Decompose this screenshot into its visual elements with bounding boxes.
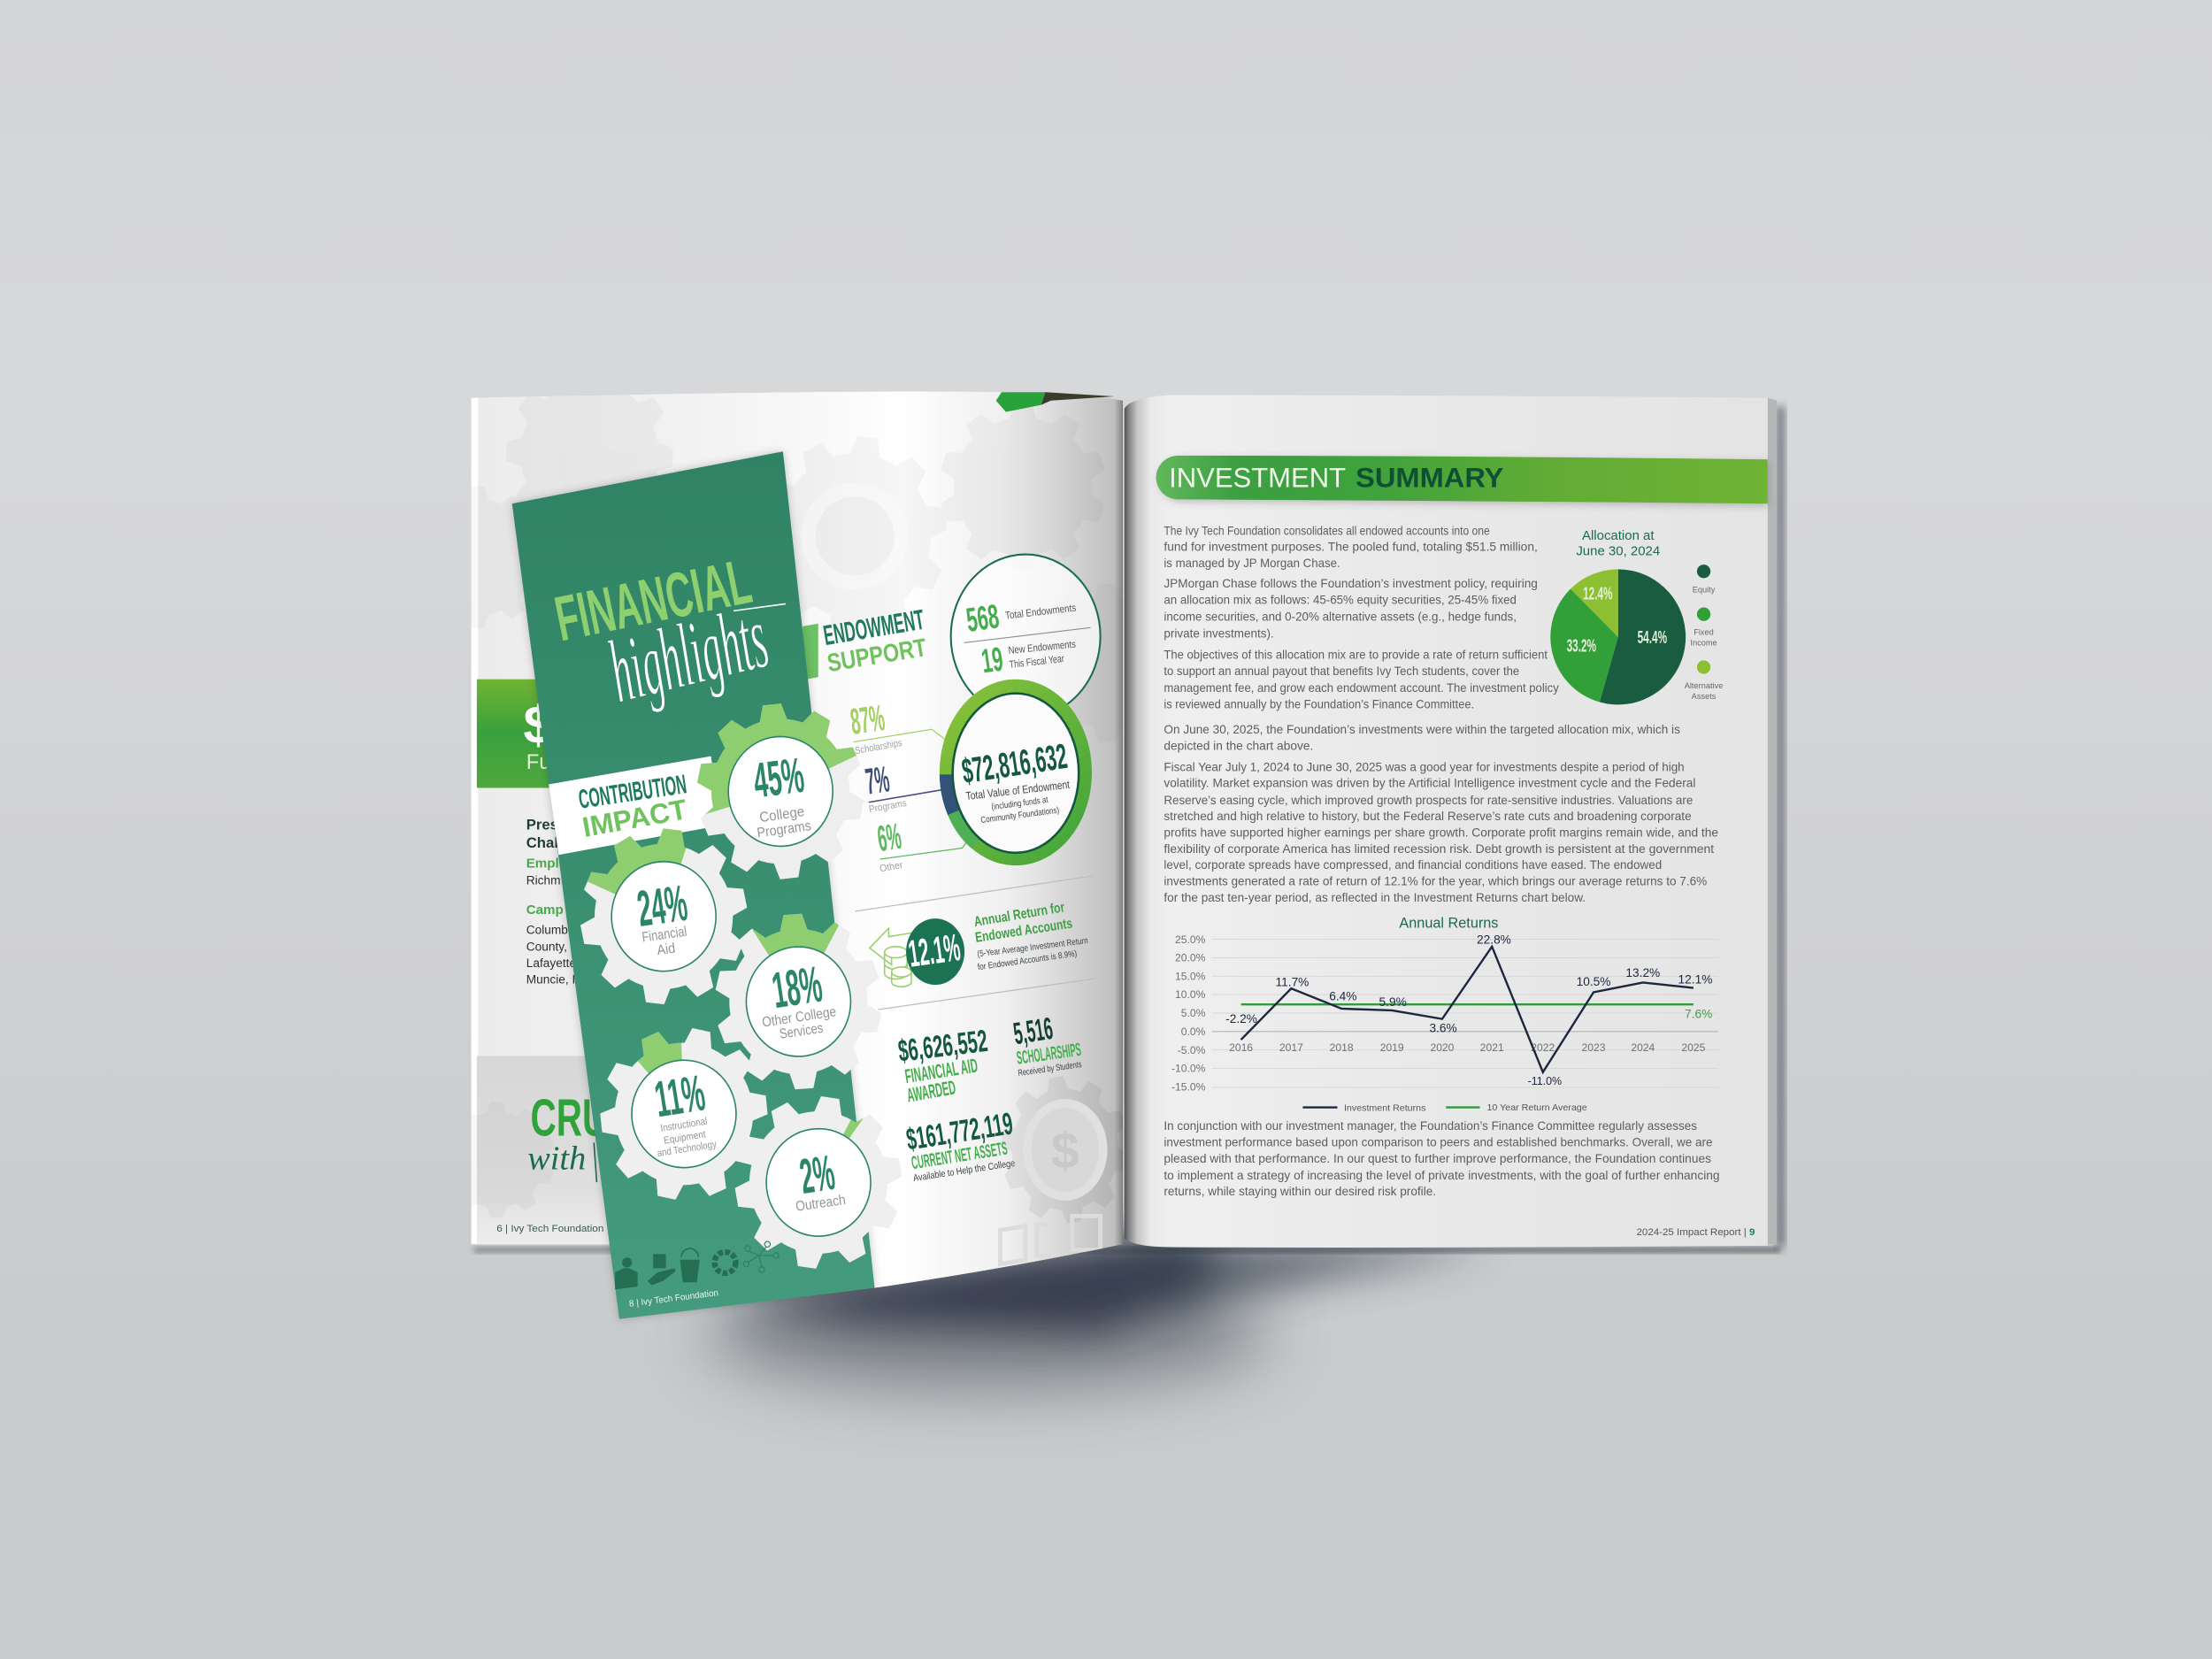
- intro text block: to support an annual payout that benefits Ivy Tech students, cover the: [1164, 664, 1519, 678]
- data labels: 3.6%: [1429, 1021, 1457, 1034]
- intro text block: [1164, 524, 1559, 710]
- gear labels: Aid: [656, 941, 676, 958]
- endowment count circle: New Endowments: [1008, 639, 1077, 657]
- text: SCHOLARSHIPS: [1016, 1040, 1082, 1069]
- divider: [879, 979, 1095, 1010]
- gear labels: Financial: [641, 925, 687, 946]
- watermark gear hub: [802, 482, 909, 589]
- data labels: 22.8%: [1477, 933, 1511, 947]
- closing text block: investment performance based upon comparison to peers and established benchmarks. Overall, we are: [1164, 1135, 1713, 1148]
- x axis labels: 2017: [1279, 1041, 1303, 1054]
- investment summary banner: INVESTMENT: [1169, 463, 1346, 494]
- data labels: 6.4%: [1329, 989, 1356, 1002]
- chart legend: [1302, 1102, 1587, 1113]
- intro text block: income securities, and 0-20% alternative assets (e.g., hedge funds,: [1164, 611, 1517, 624]
- data labels: -11.0%: [1528, 1075, 1562, 1087]
- page 9 footer: 2024-25 Impact Report | 9: [1636, 1227, 1755, 1238]
- intro text block: an allocation mix as follows: 45-65% equity securities, 25-45% fixed: [1164, 593, 1517, 606]
- dollar gear watermark: page 8: [998, 1076, 1122, 1267]
- y axis labels: 15.0%: [1175, 970, 1206, 982]
- x axis labels: [1229, 1041, 1706, 1054]
- page 8 footer: 8 | Ivy Tech Foundation: [628, 1288, 719, 1310]
- x axis labels: 2020: [1430, 1041, 1455, 1054]
- intro text block: is reviewed annually by the Foundation’s Finance Committee.: [1164, 697, 1474, 710]
- y axis labels: 20.0%: [1175, 952, 1206, 964]
- financial aid stats: AWARDED: [905, 1076, 957, 1107]
- green financial highlights sheet: [512, 451, 913, 1319]
- allocation breakdown labels and connector lines: 87%: [848, 696, 887, 742]
- dark gear teeth near spine: [1028, 584, 1187, 742]
- president profile text: page 6: County,: [526, 941, 567, 954]
- right page: [1125, 395, 1777, 1248]
- allocation breakdown labels and connector lines: Programs: [868, 798, 908, 815]
- closing text block: pleased with that performance. In our quest to further improve performance, the Foundation continues: [1164, 1152, 1711, 1165]
- title: financial highlights: FINANCIAL: [549, 546, 757, 655]
- background gear watermarks: [563, 449, 1012, 636]
- data labels: 12.1%: [1678, 972, 1712, 986]
- president profile text: page 6: Camp: [526, 902, 564, 918]
- endowment count circle: 19: [979, 641, 1005, 680]
- x axis labels: 2021: [1480, 1041, 1504, 1054]
- financial aid stats: $161,772,119: [904, 1106, 1015, 1157]
- market commentary text block: investments generated a rate of return of 12.1% for the year, which brings our average returns to 7.6%: [1164, 874, 1707, 887]
- dollar gear watermark: page 8: $: [1051, 1123, 1079, 1179]
- data labels: [1225, 933, 1712, 1087]
- investment summary banner: [1156, 456, 1768, 506]
- gear labels: Outreach: [795, 1193, 847, 1215]
- gear: 45% college programs: [697, 703, 864, 879]
- pie legend: Fixed: [1694, 627, 1714, 636]
- intro text block: The Ivy Tech Foundation consolidates all endowed accounts into one: [1164, 524, 1490, 537]
- pie legend: Equity: [1693, 586, 1716, 595]
- annual return block: (5-Year Average Investment Return: [977, 936, 1088, 959]
- market commentary text block: On June 30, 2025, the Foundation’s investments were within the targeted allocation mix, which is: [1164, 723, 1680, 736]
- green financial highlights sheet: highlights: [600, 588, 777, 722]
- y axis labels: [1171, 933, 1206, 1093]
- president profile text: page 6: Muncie, I: [526, 972, 575, 986]
- gear labels: Instructional: [660, 1117, 708, 1134]
- gear labels: Programs: [757, 818, 812, 841]
- x axis labels: 2016: [1229, 1041, 1253, 1054]
- green heading band: page 6: [476, 680, 549, 787]
- gray crucial panel: page 6: with: [527, 1141, 586, 1178]
- annual returns line chart: Annual Returns: [1399, 915, 1498, 931]
- endowment count circle: This Fiscal Year: [1009, 653, 1064, 671]
- x axis labels: 2019: [1380, 1041, 1404, 1054]
- chart legend: 10 Year Return Average: [1486, 1102, 1587, 1113]
- x axis labels: 2025: [1681, 1041, 1706, 1054]
- data labels: 5.9%: [1379, 995, 1407, 1009]
- gear labels: Equipment: [663, 1129, 707, 1147]
- gear labels: [634, 747, 847, 1215]
- endowment count circle: 568: [964, 597, 1002, 640]
- total endowment value ring: $72,816,632: [959, 737, 1070, 791]
- market commentary text block: depicted in the chart above.: [1164, 739, 1313, 752]
- gear labels: 2%: [796, 1144, 838, 1204]
- data labels: -2.2%: [1225, 1012, 1257, 1025]
- divider: [855, 876, 1093, 911]
- market commentary text block: volatility. Market expansion was driven by the Artificial Intelligence investment cycle and the Federal: [1164, 777, 1695, 790]
- financial aid stats: FINANCIAL AID: [903, 1054, 979, 1087]
- title: financial highlights: [549, 546, 786, 722]
- gear labels: Services: [779, 1021, 824, 1042]
- financial aid stats: $6,626,552: [896, 1024, 989, 1069]
- green heading band: page 6: Fu: [526, 750, 551, 774]
- intro text block: The objectives of this allocation mix are to provide a rate of return sufficient: [1164, 649, 1548, 662]
- market commentary text block: Fiscal Year July 1, 2024 to June 30, 2025 was a good year for investments despite a period of high: [1164, 760, 1685, 773]
- gear labels: 11%: [651, 1064, 709, 1128]
- contribution impact band: CONTRIBUTION: [577, 770, 688, 815]
- return percentage badge: 12.1%: [906, 926, 963, 976]
- intro text block: JPMorgan Chase follows the Foundation’s investment policy, requiring: [1164, 577, 1538, 590]
- market commentary text block: flexibility of corporate America has limited recession risk. Debt growth is persistent at the government: [1164, 842, 1714, 856]
- financial aid stats: CURRENT NET ASSETS: [910, 1139, 1009, 1173]
- president profile text: page 6: Columb: [526, 923, 568, 936]
- president profile text: page 6: Chal: [526, 834, 558, 851]
- gear labels: and Technology: [657, 1140, 718, 1159]
- data labels: 13.2%: [1625, 966, 1660, 979]
- pie legend: Assets: [1692, 692, 1717, 701]
- president profile text: page 6: Lafayette: [526, 956, 576, 970]
- gray crucial panel: page 6: [476, 1056, 609, 1244]
- icon: arrow and coins: [870, 928, 914, 987]
- closing text block: returns, while staying within our desired risk profile.: [1164, 1185, 1436, 1198]
- intro text block: is managed by JP Morgan Chase.: [1164, 557, 1340, 570]
- endowment count circle: Total Endowments: [1004, 603, 1077, 622]
- contribution impact band: [549, 757, 721, 855]
- curled photo tip at top of page 8: [996, 392, 1115, 412]
- market commentary text block: [1164, 723, 1718, 904]
- allocation breakdown labels and connector lines: Other: [879, 860, 904, 874]
- allocation breakdown labels and connector lines: [848, 696, 971, 874]
- x axis labels: 2022: [1531, 1041, 1555, 1054]
- x axis labels: 2018: [1330, 1041, 1354, 1054]
- market commentary text block: profits have supported higher earnings per share growth. Corporate profit margins remain wide, and the: [1164, 826, 1718, 839]
- allocation pie chart: 54.4%: [1638, 627, 1667, 648]
- annual return block: [870, 900, 1088, 987]
- investment returns line: [1241, 947, 1694, 1072]
- gear labels: 45%: [750, 747, 807, 808]
- gear labels: 18%: [769, 956, 826, 1019]
- y axis labels: -5.0%: [1178, 1044, 1206, 1056]
- investment summary banner: SUMMARY: [1356, 463, 1504, 494]
- gray crucial panel: page 6: CRU: [530, 1088, 608, 1147]
- market commentary text block: stretched and high relative to history, but the Federal Reserve’s rate cuts and broadening corporate: [1164, 810, 1692, 823]
- return percentage badge: [906, 918, 964, 985]
- icons row: [615, 1241, 779, 1289]
- allocation pie chart: 33.2%: [1567, 636, 1596, 657]
- endowment support heading: SUPPORT: [826, 634, 929, 678]
- book shadow: [474, 406, 1785, 1389]
- allocation breakdown labels and connector lines: 6%: [875, 815, 903, 859]
- annual returns line chart: [1171, 915, 1718, 1113]
- market commentary text block: for the past ten-year period, as reflected in the Investment Returns chart below.: [1164, 891, 1586, 904]
- x axis labels: 2023: [1582, 1041, 1606, 1054]
- intro text block: fund for investment purposes. The pooled fund, totaling $51.5 million,: [1164, 541, 1538, 554]
- financial aid stats: 5,516: [1011, 1011, 1056, 1051]
- 10 year return average line: [1241, 1003, 1694, 1005]
- gear labels: Other College: [761, 1004, 837, 1031]
- closing text block: to implement a strategy of increasing the level of private investments, with the goal of further enhancing: [1164, 1169, 1720, 1182]
- allocation breakdown labels and connector lines: Scholarships: [854, 738, 903, 757]
- y axis labels: -10.0%: [1171, 1063, 1206, 1075]
- total endowment value ring: Total Value of Endowment: [965, 778, 1071, 803]
- contribution impact band: IMPACT: [580, 793, 690, 843]
- x axis labels: 2024: [1631, 1041, 1655, 1054]
- pie legend: Alternative: [1685, 681, 1723, 690]
- y axis labels: 25.0%: [1175, 933, 1206, 946]
- allocation pie chart: [1550, 528, 1723, 704]
- financial aid stats: Available to Help the College: [912, 1158, 1016, 1184]
- closing text block: [1164, 1119, 1720, 1198]
- market commentary text block: Reserve’s easing cycle, which improved growth prospects for rate-sensitive industries. Valuations are: [1164, 794, 1693, 807]
- pie legend: [1685, 565, 1723, 701]
- financial aid stats: Received by Students: [1018, 1060, 1082, 1079]
- data labels: 7.6%: [1685, 1008, 1712, 1021]
- y axis labels: -15.0%: [1171, 1080, 1206, 1093]
- intro text block: private investments).: [1164, 627, 1274, 641]
- gear: 18% other college services: [715, 913, 881, 1090]
- annual return block: Annual Return for: [973, 900, 1066, 930]
- y axis labels: 5.0%: [1181, 1007, 1206, 1019]
- allocation pie chart: June 30, 2024: [1576, 543, 1660, 558]
- endowment count circle: [951, 555, 1101, 718]
- annual return block: Endowed Accounts: [974, 916, 1073, 946]
- pie legend: Income: [1690, 638, 1717, 647]
- annual return block: for Endowed Accounts is 8.9%): [977, 949, 1078, 972]
- y axis labels: 10.0%: [1175, 988, 1206, 1001]
- y axis labels: 0.0%: [1181, 1025, 1206, 1038]
- allocation breakdown labels and connector lines: 7%: [863, 757, 892, 803]
- market commentary text block: level, corporate spreads have compressed, and financial conditions have eased. The endowed: [1164, 858, 1662, 872]
- closing text block: In conjunction with our investment manager, the Foundation’s Finance Committee regularly assesses: [1164, 1119, 1697, 1133]
- endowment support heading: ENDOWMENT: [821, 603, 926, 651]
- page 6 footer: 6 | Ivy Tech Foundation: [496, 1224, 603, 1234]
- endowment support heading: [803, 603, 929, 680]
- president profile text: page 6: Pres: [526, 816, 558, 833]
- total endowment value ring: [940, 680, 1092, 865]
- total endowment value ring: Community Foundations): [980, 806, 1060, 826]
- president profile text: page 6: Empl: [526, 856, 559, 872]
- left page: page 6 and curled page 8 background: [471, 391, 1123, 1288]
- president profile text: page 6: Richm: [526, 874, 561, 887]
- intro text block: management fee, and grow each endowment account. The investment policy: [1164, 681, 1559, 695]
- gear labels: College: [758, 804, 805, 826]
- allocation pie chart: 12.4%: [1583, 584, 1613, 604]
- total endowment value ring: (including funds at: [991, 795, 1048, 812]
- president profile text: page 6: [526, 816, 576, 986]
- allocation pie chart: Allocation at: [1582, 528, 1655, 543]
- chart legend: Investment Returns: [1344, 1102, 1425, 1113]
- data labels: 11.7%: [1276, 975, 1309, 988]
- green heading band: page 6: $: [524, 695, 553, 755]
- data labels: 10.5%: [1577, 975, 1610, 988]
- gear: 24% financial aid: [580, 828, 747, 1005]
- gear: 11% instructional equipment: [600, 1028, 768, 1200]
- financial aid stats: [896, 1011, 1082, 1184]
- gear labels: 24%: [634, 875, 691, 938]
- gear: 2% outreach: [734, 1096, 902, 1269]
